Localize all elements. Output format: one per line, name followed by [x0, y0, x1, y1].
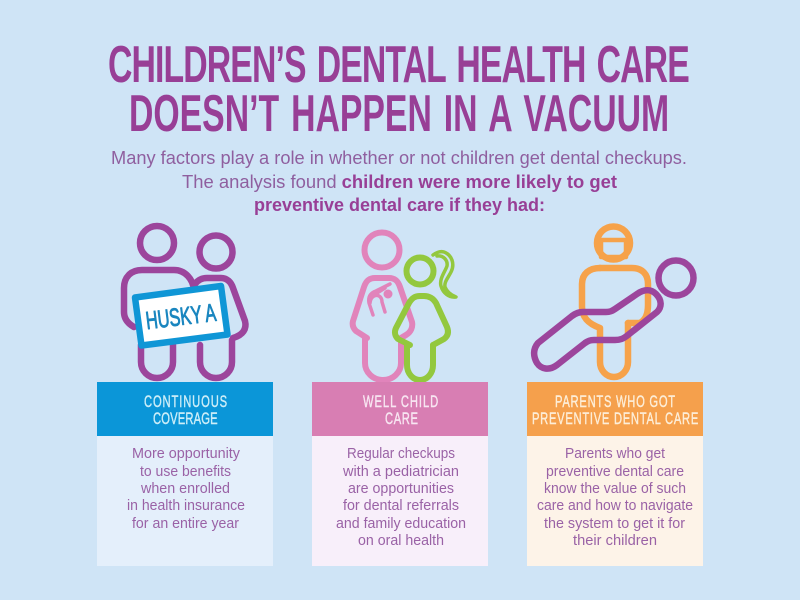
panel body [312, 436, 488, 566]
panel heading: PARENTS WHO GOT [555, 393, 675, 412]
panel: continuous coverage [97, 382, 273, 566]
panel text: know the value of such [544, 481, 686, 497]
panel text: and family education [336, 516, 466, 532]
title: CHILDREN’S DENTAL HEALTH CARE [108, 36, 690, 94]
icon: dentist and patient [534, 226, 694, 377]
panel text: for dental referrals [343, 498, 459, 514]
panel heading: WELL CHILD [363, 393, 438, 412]
panel text: on oral health [358, 533, 444, 549]
panel heading: CARE [385, 410, 418, 429]
subtitle [111, 148, 687, 215]
panel text: the system to get it for [544, 516, 685, 532]
panel: parents who got preventive dental care [527, 382, 703, 566]
title [108, 36, 690, 143]
subtitle: preventive dental care if they had: [254, 195, 545, 215]
title: DOESN’T HAPPEN IN A VACUUM [129, 85, 669, 143]
panel text: for an entire year [132, 516, 239, 532]
icon: dentist [582, 226, 648, 377]
panel text: to use benefits [140, 464, 231, 480]
panel text: when enrolled [140, 481, 230, 497]
panel body [97, 436, 273, 566]
panel heading [312, 382, 488, 436]
icon: reclining patient [534, 260, 694, 369]
subtitle: The analysis found children were more likely to get [182, 172, 617, 192]
icon: doctor [353, 232, 412, 380]
icon: two people holding Husky A card [124, 226, 246, 378]
panel text: care and how to navigate [537, 498, 693, 514]
icon: doctor and child [353, 232, 456, 380]
icon: child with ponytail [395, 252, 456, 380]
panel heading: PREVENTIVE DENTAL CARE [532, 410, 698, 429]
panel: well child care [312, 382, 488, 566]
panel heading: CONTINUOUS [144, 393, 227, 412]
panel text: Regular checkups [347, 446, 455, 462]
panel text: preventive dental care [546, 464, 684, 480]
panel heading: COVERAGE [153, 410, 218, 429]
panel text: in health insurance [127, 498, 245, 514]
panel text [537, 446, 693, 549]
panel text [336, 446, 466, 549]
panel text: More opportunity [132, 446, 241, 462]
icon: Husky A card [135, 286, 228, 346]
panel body [527, 436, 703, 566]
panel heading [527, 382, 703, 436]
icon: Husky A card: HUSKY A [144, 299, 218, 335]
panel text: their children [573, 533, 657, 549]
subtitle: Many factors play a role in whether or not children get dental checkups. [111, 148, 687, 168]
panel heading [97, 382, 273, 436]
panel text: with a pediatrician [342, 464, 459, 480]
panel text: Parents who get [565, 446, 665, 462]
panel text [127, 446, 245, 532]
panel text: are opportunities [348, 481, 454, 497]
